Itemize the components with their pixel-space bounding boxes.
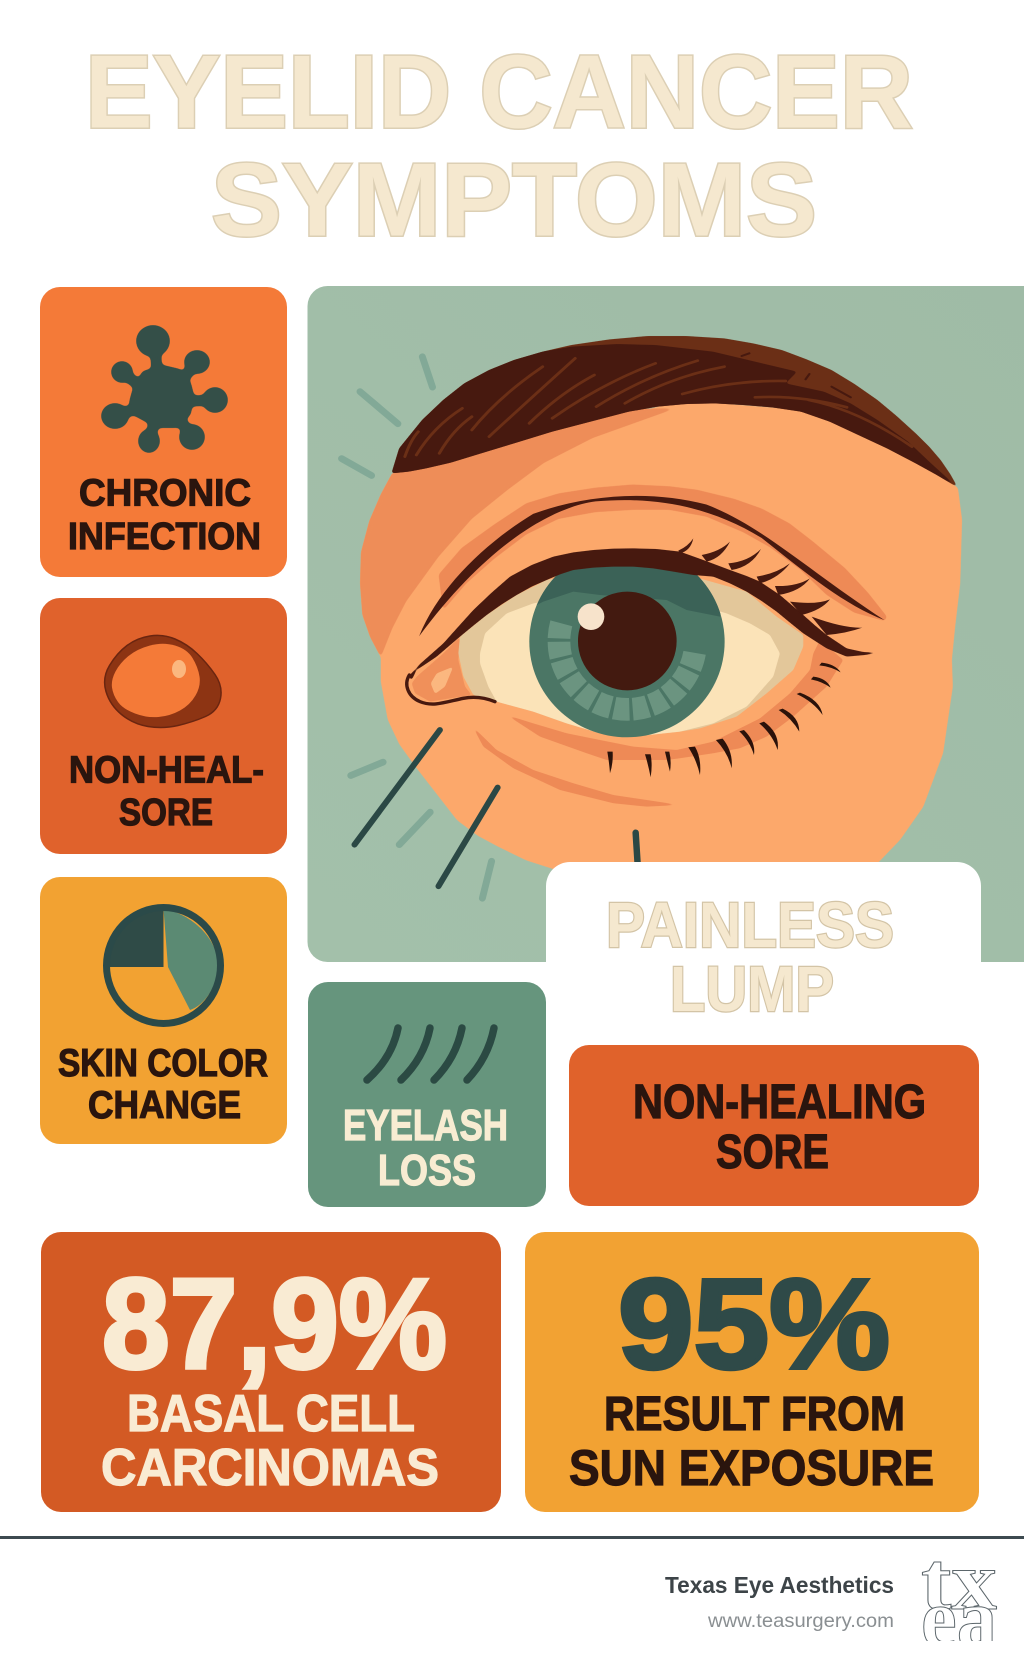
panel: stat sun exposure: [525, 1232, 979, 1512]
footer: brand: [665, 1572, 894, 1632]
tear duct outline: [407, 675, 495, 704]
panel: painless lump: [546, 862, 981, 1030]
label: non-healing sore: [633, 1076, 926, 1179]
label: chronic infection: [68, 472, 261, 558]
face skin: [360, 401, 962, 878]
icon: eyelashes: [367, 1028, 494, 1080]
crease shadow: [439, 484, 887, 621]
iris: [529, 566, 725, 738]
title: SYMPTOMS: [211, 142, 817, 258]
panel: skin color change: [40, 877, 287, 1144]
panel: eye illustration: [308, 286, 1024, 962]
tear duct: [412, 637, 472, 702]
lower lid shade: [507, 640, 843, 760]
label: skin color change: [58, 1042, 268, 1127]
icon: sore: [105, 635, 221, 728]
upper lashes: [678, 538, 862, 635]
illustration: eyebrow: [391, 336, 958, 488]
label: eyelash loss: LOSS: [378, 1146, 476, 1195]
crease line: [419, 496, 885, 636]
cheek line: [473, 727, 680, 807]
icon: virus: [101, 325, 228, 453]
title: [85, 34, 913, 258]
label: painless lump: [606, 889, 894, 1025]
panel: stat basal cell: [41, 1232, 501, 1512]
label: basal cell carcinomas: BASAL CELL: [127, 1385, 415, 1443]
label: result from sun exposure: [569, 1388, 934, 1496]
footer: brand: Texas Eye Aesthetics: [665, 1572, 894, 1598]
label: result from sun exposure: SUN EXPOSURE: [569, 1440, 934, 1496]
panel: chronic infection: [40, 287, 287, 577]
logo: tx: [921, 1535, 997, 1628]
label: chronic infection: INFECTION: [68, 516, 261, 558]
lower lashes: [607, 663, 841, 777]
logo: [922, 1562, 998, 1641]
label: non-heal sore: [69, 750, 264, 834]
label: painless lump: PAINLESS: [606, 889, 894, 961]
label: basal cell carcinomas: [101, 1385, 439, 1497]
label: non-heal sore: NON-HEAL-: [69, 750, 264, 792]
label: non-healing sore: NON-HEALING: [633, 1076, 926, 1129]
label: skin color change: SKIN COLOR: [58, 1042, 268, 1085]
label: skin color change: CHANGE: [88, 1084, 241, 1127]
illustration: face and crease: [360, 401, 962, 878]
label: basal cell carcinomas: CARCINOMAS: [101, 1439, 439, 1497]
label: eyelash loss: EYELASH: [343, 1101, 508, 1150]
label: non-heal sore: SORE: [119, 792, 213, 834]
pupil: [578, 592, 677, 690]
illustration: eye: [407, 538, 882, 807]
panel: non-healing sore: [569, 1045, 979, 1206]
upper lid: [408, 548, 882, 680]
highlight: [578, 603, 604, 630]
title: EYELID CANCER: [85, 34, 913, 150]
footer: brand: www.teasurgery.com: [707, 1611, 894, 1632]
illustration: needle lines and rays: [342, 357, 638, 898]
label: result from sun exposure: RESULT FROM: [604, 1388, 905, 1441]
forehead shadow: [360, 408, 676, 657]
label: non-healing sore: SORE: [716, 1126, 829, 1179]
stat: 95%: 95%: [618, 1253, 890, 1396]
panel: non-heal sore: [40, 598, 287, 854]
panel: eyelash loss: [308, 982, 546, 1207]
logo: ea: [921, 1572, 997, 1665]
sclera light: [480, 587, 780, 737]
label: chronic infection: CHRONIC: [79, 472, 251, 514]
label: eyelash loss: [343, 1101, 508, 1195]
stat: 87,9%: 87,9%: [102, 1253, 447, 1396]
icon: pie chart: [106, 908, 220, 1024]
sclera shadow: [458, 567, 803, 737]
label: painless lump: LUMP: [670, 953, 834, 1025]
